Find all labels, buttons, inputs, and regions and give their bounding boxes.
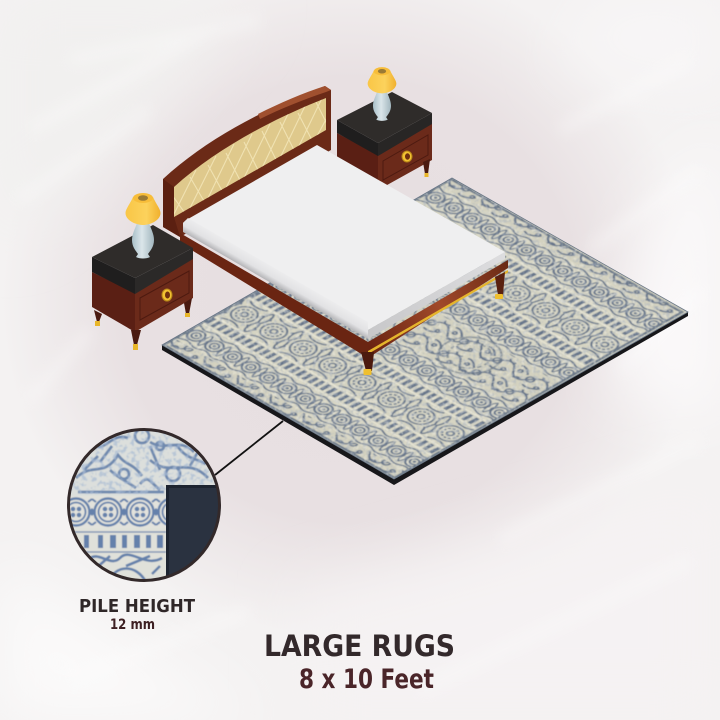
marble top	[337, 92, 432, 143]
rug: 8 x 10 feet isometric	[160, 176, 690, 485]
folded backing	[169, 488, 218, 574]
subtitle: size: 8 x 10 Feet	[299, 664, 434, 695]
drawer front	[383, 135, 428, 180]
brass handle	[402, 151, 412, 162]
gold inlay	[368, 270, 508, 354]
floral upper field	[74, 429, 208, 492]
title: LARGE RUGS	[264, 629, 455, 663]
drawer body	[337, 133, 378, 190]
brass handle	[162, 289, 172, 301]
lower border bars	[84, 535, 163, 548]
rug outline	[162, 178, 688, 479]
tufted panel	[174, 98, 326, 217]
medallion band	[70, 496, 166, 528]
right leg gold foot	[495, 294, 503, 299]
front leg	[361, 352, 374, 371]
mottled wool texture	[160, 176, 690, 482]
label: pile height: PILE HEIGHT	[79, 596, 196, 617]
drawer body	[92, 272, 135, 332]
drawer front	[140, 271, 189, 320]
bed frame right rail	[368, 260, 508, 358]
right leg	[495, 272, 505, 295]
circle outline	[68, 430, 220, 580]
face pattern	[70, 432, 215, 496]
title	[264, 629, 455, 695]
lamp	[368, 67, 396, 121]
connector line from rug to detail circle	[215, 421, 283, 475]
rug woven pattern	[160, 176, 690, 482]
mattress side left	[183, 218, 368, 339]
marble top	[92, 225, 193, 278]
front leg gold foot	[364, 369, 372, 375]
nightstand: front left	[92, 193, 193, 350]
bed frame left rail	[180, 233, 368, 358]
gold feet	[95, 313, 190, 350]
lamp	[126, 193, 160, 258]
bed	[163, 86, 508, 375]
label: 12 mm: 12 mm	[110, 617, 155, 633]
mattress side right	[368, 252, 505, 339]
legs	[94, 298, 192, 345]
leg	[423, 159, 430, 174]
mattress top	[183, 145, 505, 330]
headboard	[163, 86, 331, 237]
rug black edge	[162, 312, 688, 485]
gold foot	[424, 173, 428, 177]
label: pile height	[79, 596, 196, 633]
nightstand: back right	[337, 67, 432, 190]
detail circle: pile height close-up	[66, 428, 222, 584]
